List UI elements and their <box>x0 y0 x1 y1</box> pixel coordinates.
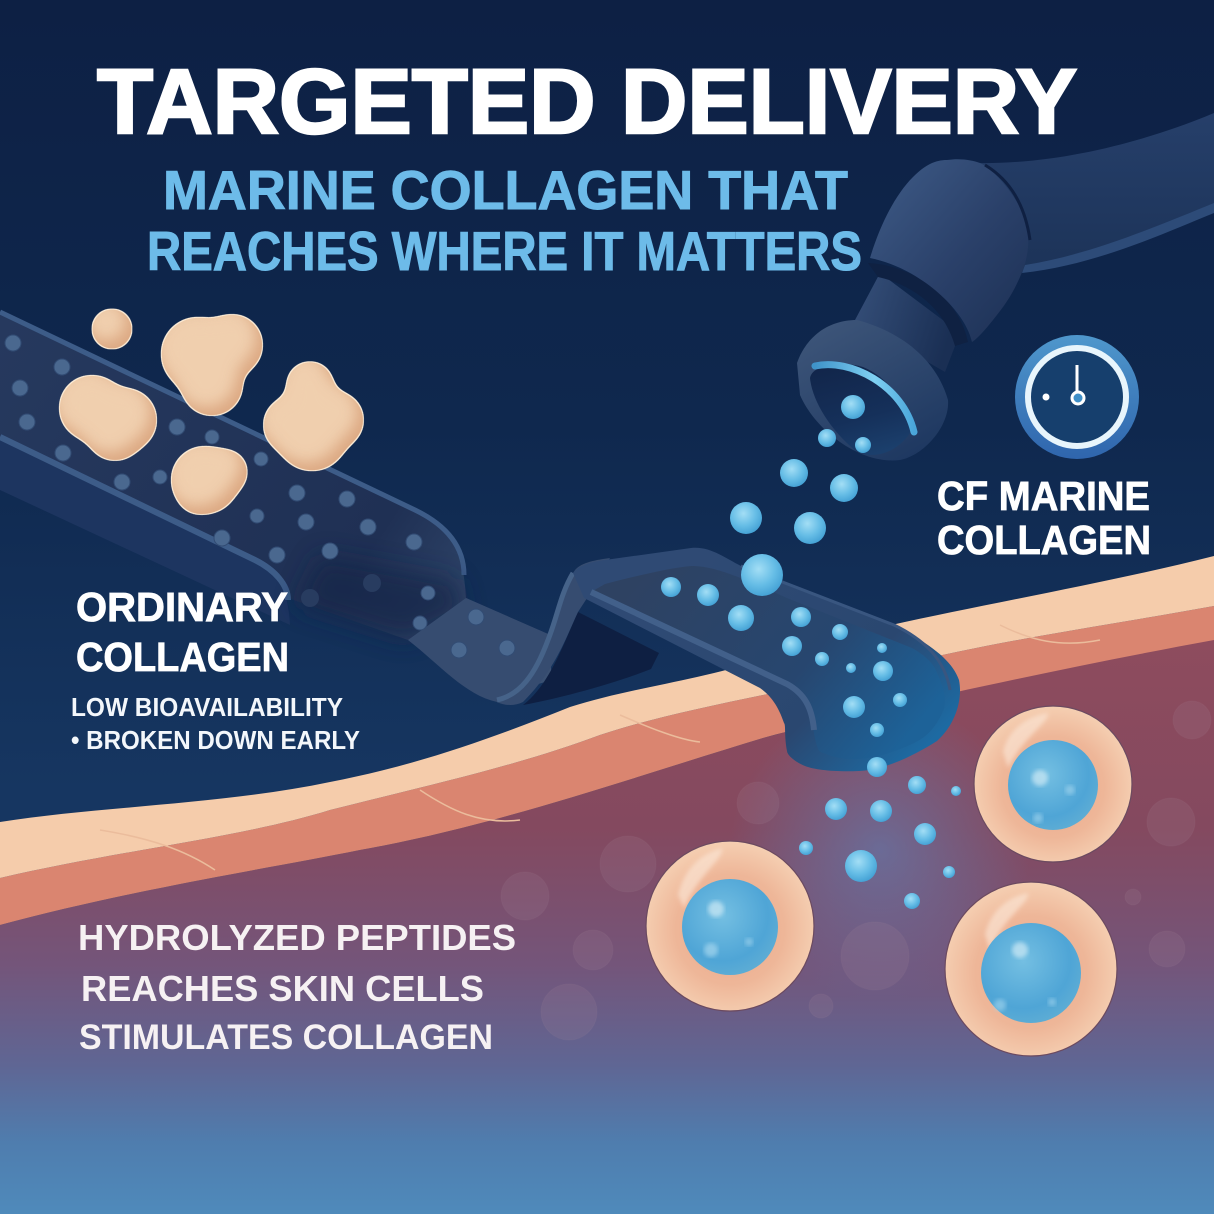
label: ordinary collagen: COLLAGEN <box>76 634 289 680</box>
nozzle neck <box>855 273 960 372</box>
label: CF marine collagen <box>937 473 1151 563</box>
strip surface <box>0 312 552 695</box>
label: ordinary collagen <box>76 584 289 680</box>
cell lower right <box>945 882 1117 1056</box>
shadow under fold <box>523 612 659 705</box>
skin layer <box>0 556 1214 925</box>
tissue below skin <box>0 636 1214 1214</box>
hydrolyzed peptide benefits: HYDROLYZED PEPTIDES <box>78 917 516 958</box>
nozzle flange <box>797 320 948 460</box>
subtitle: REACHES WHERE IT MATTERS <box>147 220 862 282</box>
ordinary collagen details <box>71 692 360 755</box>
strip top surface <box>591 566 945 759</box>
hydrolyzed peptide benefits <box>78 917 516 1057</box>
hose <box>975 113 1214 272</box>
fold wall <box>408 558 610 705</box>
nozzle face <box>810 364 910 455</box>
label: CF marine collagen: COLLAGEN <box>937 517 1151 563</box>
peptide droplets <box>661 395 961 909</box>
label: CF marine collagen: CF MARINE <box>937 473 1150 519</box>
title: TARGETED DELIVERY <box>97 51 1077 153</box>
subtitle <box>147 159 862 282</box>
hydrolyzed peptide benefits: REACHES SKIN CELLS <box>81 968 484 1009</box>
strip dots <box>5 335 515 658</box>
hydrolyzed peptide benefits: STIMULATES COLLAGEN <box>79 1018 493 1057</box>
tan collagen clumps <box>60 309 363 514</box>
strip outer body <box>573 548 960 771</box>
nozzle elbow dome <box>870 159 1028 342</box>
elbow joint line <box>985 165 1030 240</box>
background cells <box>501 701 1211 1040</box>
ordinary collagen strip <box>0 312 659 705</box>
cell lower left <box>646 841 814 1011</box>
subtitle: MARINE COLLAGEN THAT <box>163 159 848 221</box>
nozzle <box>797 159 1030 460</box>
nozzle collar shadow <box>868 263 968 346</box>
hose lower highlight <box>1022 203 1214 273</box>
nozzle light ring <box>815 365 914 432</box>
strip rim <box>591 592 814 730</box>
icon: clock <box>1015 335 1139 459</box>
cell upper right <box>974 706 1132 862</box>
ordinary collagen details: LOW BIOAVAILABILITY <box>71 692 343 722</box>
delivery strip crossing skin <box>573 548 960 771</box>
strip shadow <box>295 555 465 640</box>
strip underside <box>0 437 290 625</box>
ordinary collagen details: • BROKEN DOWN EARLY <box>71 725 360 755</box>
label: ordinary collagen: ORDINARY <box>76 584 288 630</box>
strip rims <box>0 312 464 575</box>
